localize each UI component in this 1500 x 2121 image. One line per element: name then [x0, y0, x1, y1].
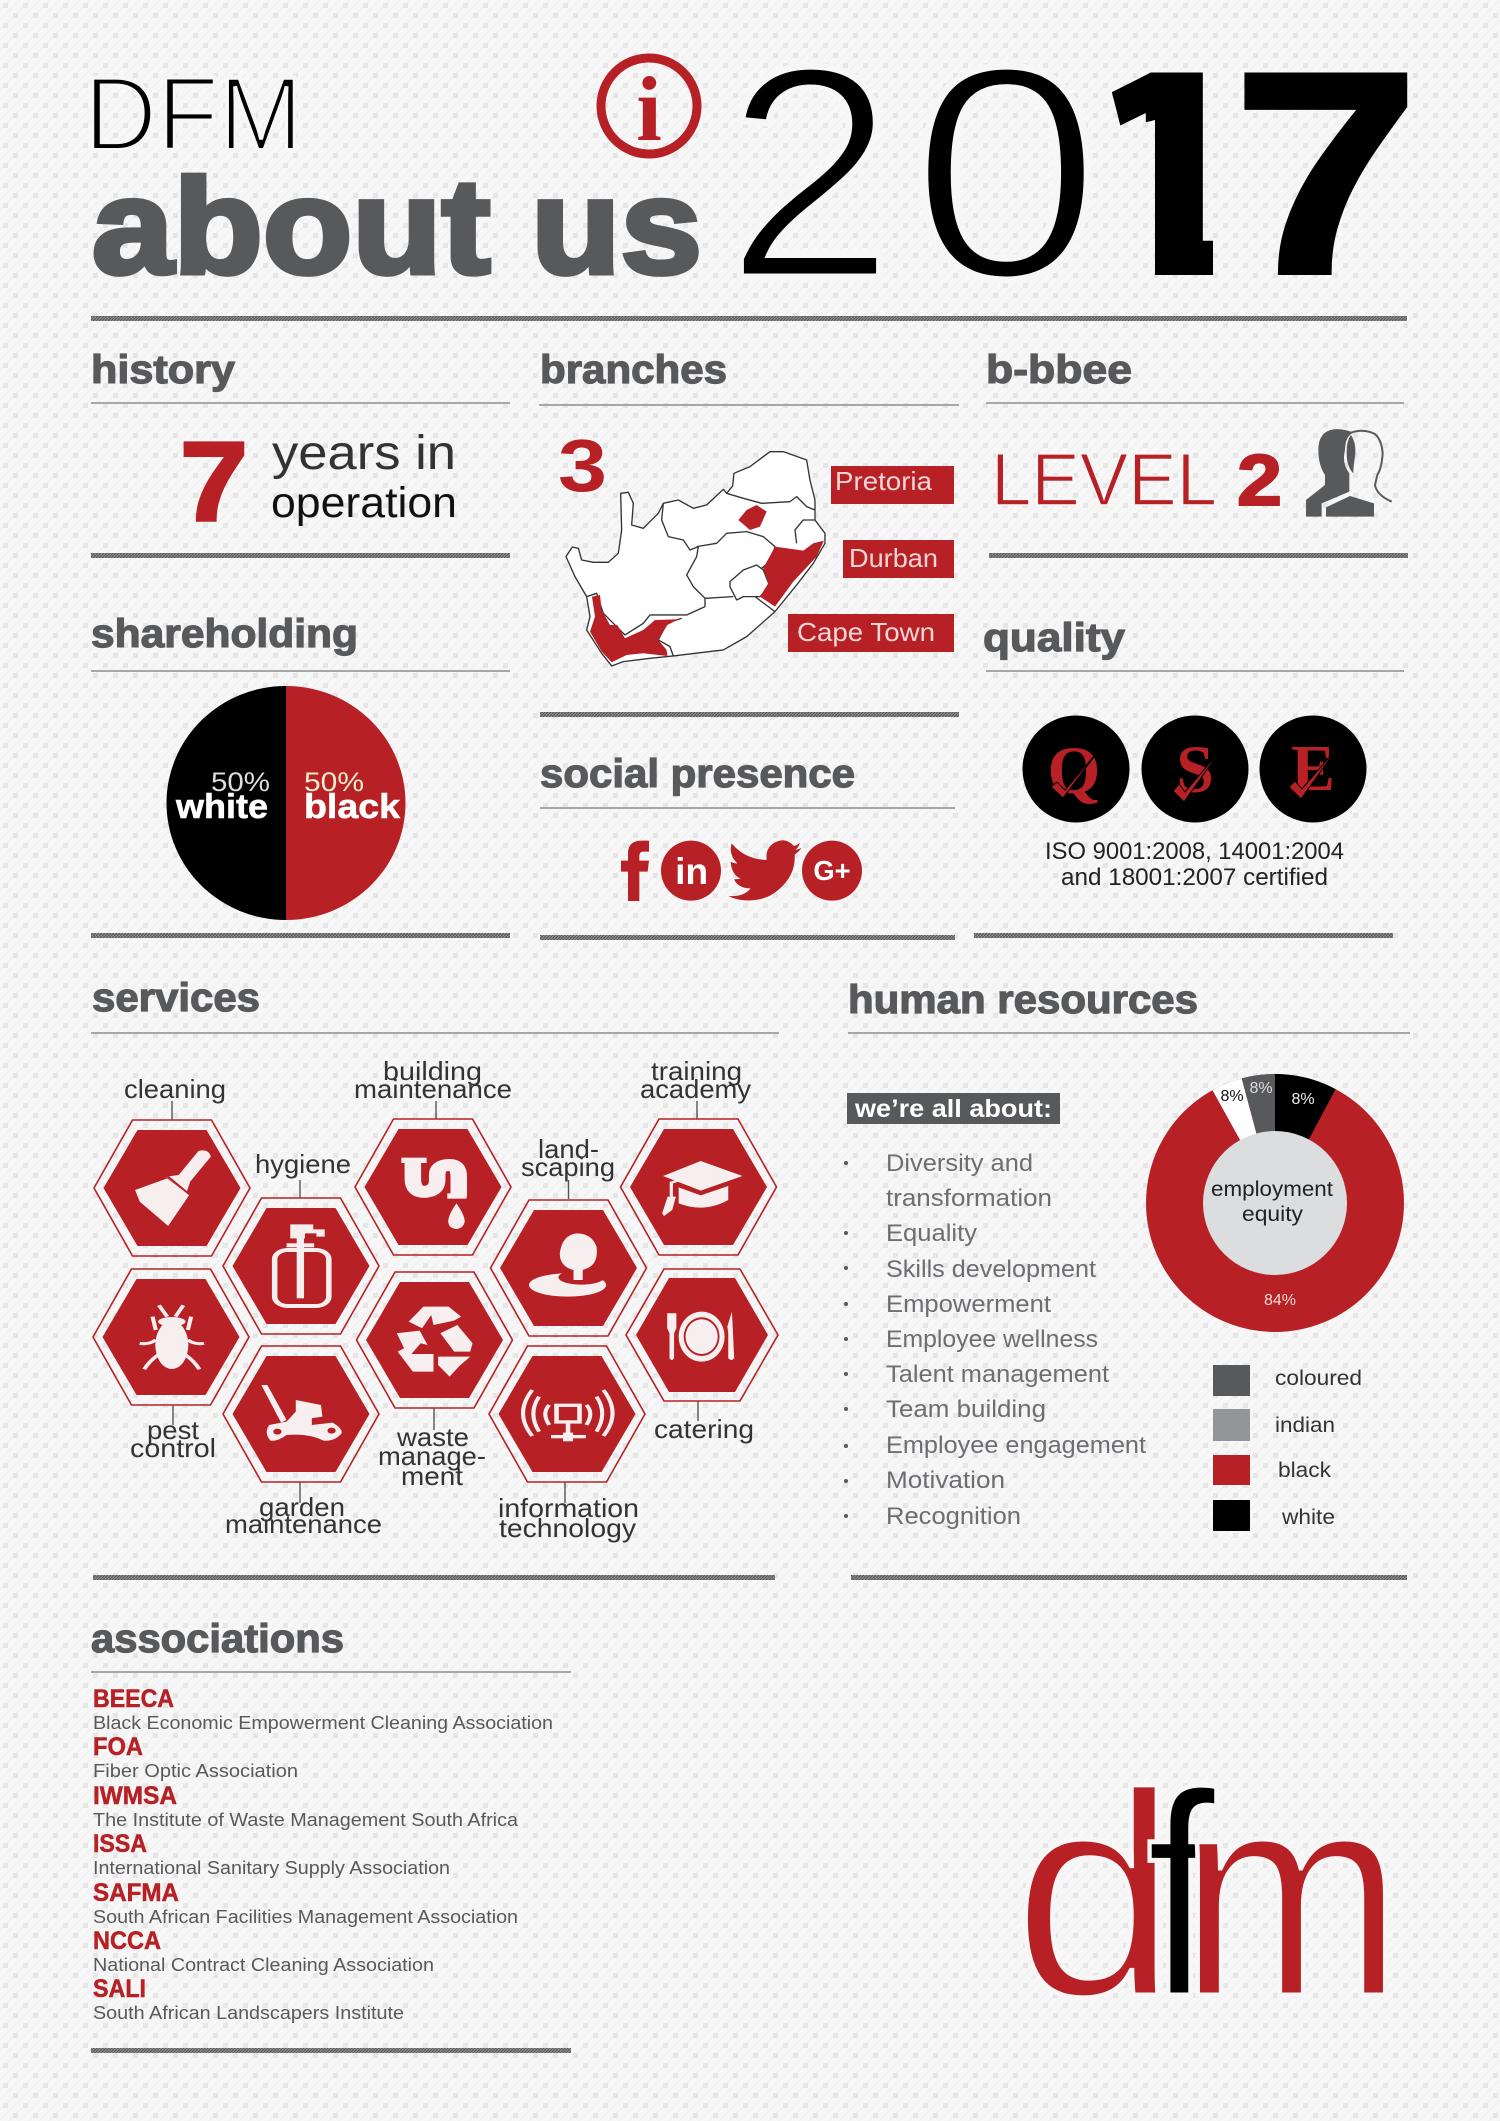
- association: FOA: Fiber Optic Association: [93, 1761, 298, 1781]
- icon: google plus: [802, 841, 862, 901]
- service: landscaping: scaping: [521, 1152, 615, 1182]
- icon: info: [601, 58, 697, 160]
- service: hygiene: [223, 1149, 379, 1334]
- badge: S: S: [1176, 731, 1214, 807]
- logo: dfm: f: [1146, 1733, 1217, 2057]
- association: ISSA: ISSA: [93, 1830, 147, 1858]
- pie chart: 50%: [304, 767, 364, 797]
- label: Durban: [843, 540, 954, 578]
- text: ISO certification: and 18001:2007 certified: [1061, 864, 1328, 891]
- legend: white: [1281, 1506, 1335, 1529]
- association: ISSA: International Sanitary Supply Association: [93, 1858, 450, 1878]
- service: information technology: [489, 1346, 645, 1543]
- service: garden maintenance: garden: [259, 1492, 345, 1522]
- donut chart: employment equity: 8%: [1249, 1080, 1273, 1097]
- association: SALI: SALI: [93, 1975, 146, 2003]
- heading: branches: branches: [540, 348, 727, 392]
- label: Cape Town: [788, 614, 954, 652]
- heading: history: history: [91, 348, 236, 392]
- list: values: Employee engagement: [886, 1432, 1146, 1459]
- icon: google plus: G+: [813, 855, 851, 886]
- heading: quality: quality: [983, 616, 1126, 660]
- list: values: Recognition: [886, 1503, 1021, 1530]
- icon: info: i: [636, 58, 662, 160]
- service: information technology: information: [498, 1493, 639, 1523]
- panel: shareholding: [91, 612, 510, 920]
- list: values: Skills development: [886, 1256, 1096, 1283]
- year: 1: 1: [1063, 12, 1268, 334]
- label: Durban: Durban: [849, 543, 938, 573]
- service: training academy: academy: [640, 1074, 751, 1104]
- number: 7 years: 7: [180, 419, 248, 544]
- association: SALI: [93, 1975, 404, 2023]
- association: SAFMA: [93, 1879, 518, 1927]
- service: cleaning: cleaning: [124, 1074, 226, 1104]
- label: Cape Town: Cape Town: [797, 617, 935, 647]
- service: pest control: [93, 1269, 249, 1463]
- badge: E: [1260, 716, 1366, 822]
- heading: b-bbee: b-bbee: [986, 348, 1132, 392]
- association: FOA: [93, 1733, 298, 1781]
- year: 2: 2: [725, 4, 895, 341]
- service: catering: catering: [654, 1414, 754, 1444]
- service: garden maintenance: maintenance: [225, 1509, 382, 1539]
- service: catering: [626, 1269, 778, 1444]
- number: 3: 3: [558, 424, 607, 507]
- service: pest control: control: [130, 1433, 216, 1463]
- text: operation: operation: [271, 479, 457, 527]
- icon: twitter: [728, 840, 802, 900]
- panel: history: [91, 348, 510, 544]
- pie chart: white: [175, 788, 268, 826]
- association: NCCA: [93, 1927, 434, 1975]
- service: landscaping: land-: [538, 1134, 599, 1164]
- service: building maintenance: [354, 1056, 512, 1255]
- association: BEECA: Black Economic Empowerment Cleaning Association: [93, 1713, 553, 1733]
- service: waste management: ment: [401, 1461, 464, 1491]
- label: Pretoria: [831, 466, 954, 504]
- service: information technology: technology: [499, 1513, 636, 1543]
- panel: branches: [539, 348, 959, 666]
- service: garden maintenance: [223, 1346, 382, 1539]
- title: about us: about us: [92, 151, 702, 302]
- heading: associations: associations: [91, 1617, 344, 1661]
- panel: quality: [983, 616, 1404, 891]
- text: ISO certification: ISO 9001:2008, 14001:2004: [1045, 838, 1344, 865]
- service: waste management: manage-: [378, 1441, 486, 1471]
- heading: human resources: human resources: [848, 978, 1198, 1022]
- panel: social presence: [540, 752, 955, 901]
- list: values: Diversity and: [886, 1150, 1033, 1177]
- service: landscaping: [490, 1134, 646, 1336]
- logo: dfm: m: [1179, 1733, 1403, 2057]
- list: values: transformation: [886, 1185, 1052, 1212]
- text: LEVEL: LEVEL: [991, 438, 1217, 521]
- donut chart: employment equity: 8%: [1220, 1088, 1244, 1105]
- list: values: Employee wellness: [886, 1326, 1098, 1353]
- icon: people silhouette: [1306, 429, 1392, 517]
- year: 0: 0: [911, 4, 1101, 341]
- icon: linkedin: in: [675, 850, 708, 892]
- title: DFM: DFM: [84, 56, 303, 173]
- association: SAFMA: South African Facilities Management Association: [93, 1907, 518, 1927]
- donut chart: employment equity: employment: [1211, 1178, 1333, 1201]
- heading: social presence: social presence: [540, 752, 855, 796]
- heading: services: services: [92, 976, 260, 1020]
- service: waste management: [356, 1272, 512, 1491]
- list: values: Equality: [886, 1220, 977, 1247]
- logo: dfm: [1013, 1733, 1403, 2057]
- heading: shareholding: shareholding: [91, 612, 358, 656]
- text: ISO certification: [1045, 838, 1344, 891]
- association: IWMSA: IWMSA: [93, 1782, 177, 1810]
- icon: facebook: [621, 841, 649, 901]
- service: training academy: [620, 1056, 776, 1255]
- map: South Africa: [566, 452, 825, 666]
- legend: [1213, 1365, 1362, 1531]
- panel: associations: [91, 1617, 571, 2023]
- legend: indian: [1275, 1414, 1335, 1437]
- list: values: Motivation: [886, 1467, 1005, 1494]
- list: values: Team building: [886, 1396, 1046, 1423]
- list: values: [844, 1150, 1146, 1530]
- logo: dfm: d: [1013, 1733, 1177, 2057]
- donut chart: employment equity: 84%: [1264, 1292, 1296, 1309]
- service: pest control: pest: [147, 1415, 200, 1445]
- icon: linkedin: [661, 841, 721, 901]
- association: SALI: South African Landscapers Institute: [93, 2003, 404, 2023]
- badge: Q: [1022, 716, 1130, 822]
- pie chart: black: [304, 788, 400, 826]
- service: training academy: training: [651, 1056, 742, 1086]
- legend: black: [1278, 1459, 1332, 1482]
- header: [93, 54, 1408, 284]
- service: cleaning: [94, 1074, 250, 1256]
- donut chart: employment equity: 8%: [1291, 1091, 1315, 1108]
- legend: coloured: [1275, 1367, 1362, 1390]
- social icons: [621, 840, 862, 901]
- year: 7: 7: [1233, 12, 1419, 334]
- association: FOA: FOA: [93, 1733, 143, 1761]
- panel: b-bbee: [986, 348, 1404, 521]
- badge: S: [1142, 716, 1248, 822]
- list: values: Empowerment: [886, 1291, 1051, 1318]
- service: waste management: waste: [396, 1422, 469, 1452]
- list: values: Talent management: [886, 1361, 1109, 1388]
- pie chart: 50%: [211, 767, 270, 797]
- panel: services: [91, 976, 779, 1543]
- association: NCCA: National Contract Cleaning Association: [93, 1955, 434, 1975]
- panel: human resources: [844, 978, 1410, 1531]
- donut chart: employment equity: equity: [1242, 1203, 1304, 1226]
- label: Pretoria: Pretoria: [835, 466, 933, 496]
- tag: we're all about: we’re all about:: [854, 1095, 1052, 1123]
- text: 2: 2: [1237, 441, 1282, 521]
- association: NCCA: NCCA: [93, 1927, 161, 1955]
- badge: Q: Q: [1048, 732, 1100, 808]
- association: BEECA: BEECA: [93, 1685, 174, 1713]
- service: building maintenance: building: [383, 1056, 482, 1086]
- association: BEECA: [93, 1685, 553, 1733]
- association: SAFMA: SAFMA: [93, 1879, 179, 1907]
- service: building maintenance: maintenance: [354, 1074, 512, 1104]
- association: IWMSA: [93, 1782, 519, 1830]
- pie chart: [166, 686, 405, 920]
- association: ISSA: [93, 1830, 450, 1878]
- text: years in: years in: [272, 427, 456, 480]
- badge: E: E: [1291, 732, 1335, 805]
- service: hygiene: hygiene: [255, 1149, 351, 1179]
- association: IWMSA: The Institute of Waste Management South Africa: [93, 1810, 519, 1830]
- donut chart: employment equity: [1146, 1074, 1404, 1332]
